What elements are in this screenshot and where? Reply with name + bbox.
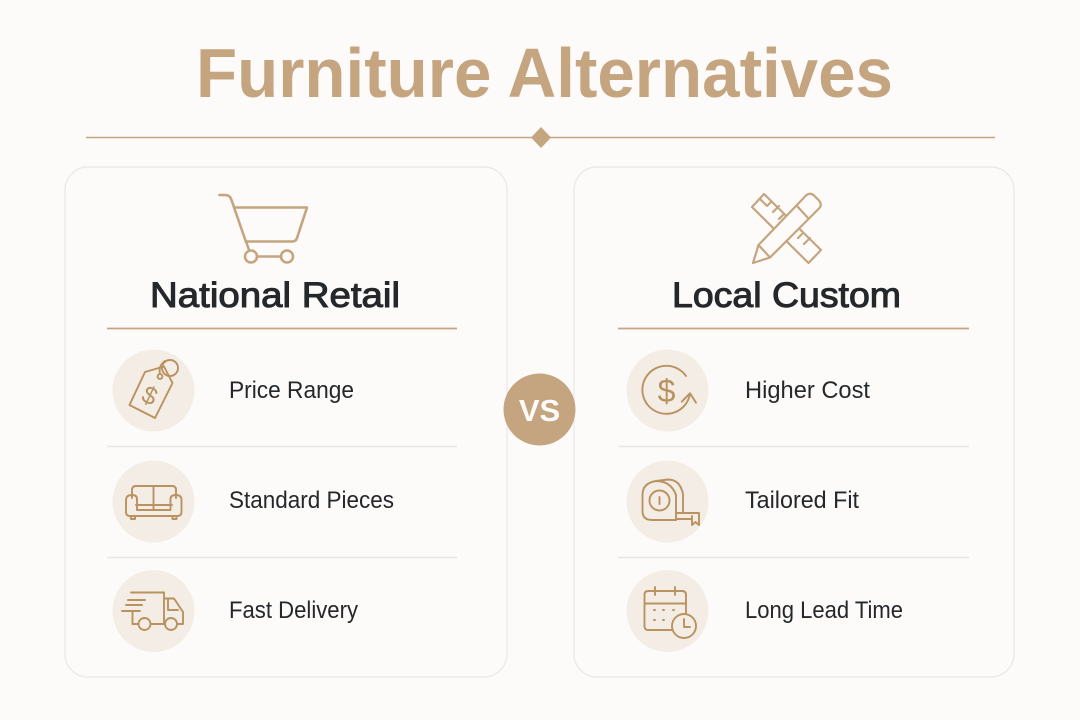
heading: national retail: National Retail — [150, 276, 400, 315]
row: fast delivery — [112, 570, 358, 652]
icon: ruler and pencil — [752, 194, 821, 263]
label: Standard Pieces — [229, 487, 394, 514]
label: Higher Cost — [745, 377, 870, 404]
icon: dollar cycle: $ — [658, 373, 676, 409]
row: long lead time — [626, 570, 903, 652]
icon: tape measure — [626, 460, 708, 542]
vs badge: VS — [519, 393, 560, 428]
title divider with diamond — [86, 127, 995, 148]
icon: price tag — [112, 350, 194, 432]
panel: national retail — [65, 167, 507, 677]
row: tailored fit — [626, 460, 859, 542]
row: price range — [112, 350, 354, 432]
label: Fast Delivery — [229, 597, 358, 624]
label: Long Lead Time — [745, 597, 903, 624]
vs badge — [504, 374, 576, 446]
label: Price Range — [229, 377, 354, 404]
icon: dollar cycle — [626, 350, 708, 432]
panel: local custom — [574, 167, 1014, 677]
icon: shopping cart — [220, 195, 307, 262]
title: Furniture Alternatives — [196, 34, 893, 112]
icon: calendar with clock — [626, 570, 708, 652]
row: higher cost — [626, 350, 870, 432]
icon: delivery truck — [112, 570, 194, 652]
heading: local custom: Local Custom — [672, 276, 901, 315]
icon: sofa — [112, 460, 194, 542]
icon: price tag: $ — [137, 380, 162, 412]
row: standard pieces — [112, 460, 394, 542]
label: Tailored Fit — [745, 487, 859, 514]
